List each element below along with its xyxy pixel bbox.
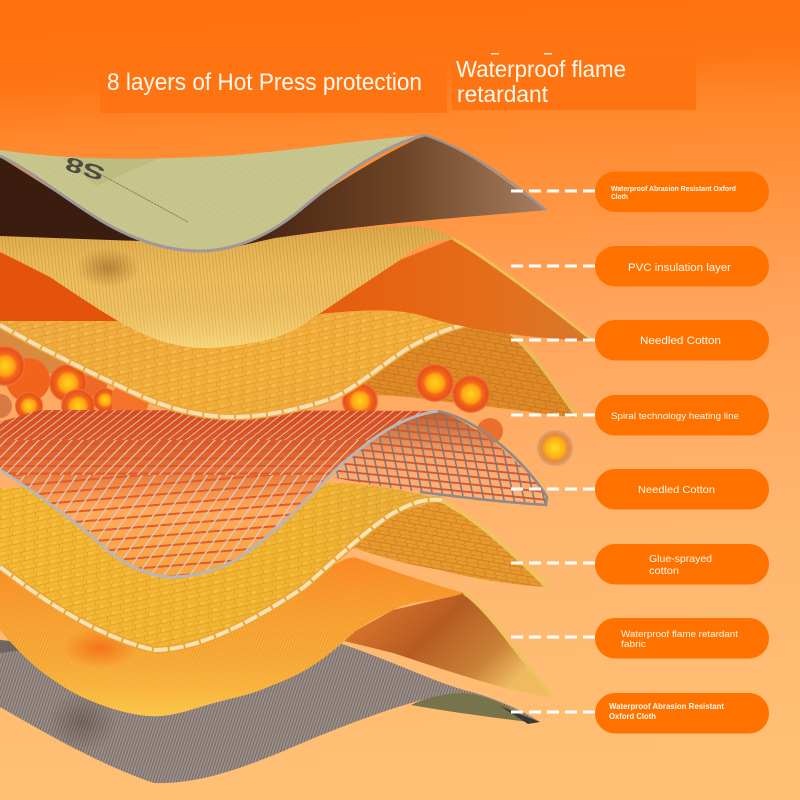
label: waterproof abrasion resistant oxford cloth: Oxford Cloth <box>609 712 656 721</box>
label: waterproof abrasion resistant oxford cloth: Waterproof Abrasion Resistant <box>609 702 724 711</box>
leader lines <box>511 191 595 712</box>
layer 1: waterproof abrasion resistant oxford cloth <box>0 135 546 251</box>
title banner left: 8 layers of Hot Press protection <box>107 69 422 96</box>
label: waterproof abrasion resistant oxford cloth <box>595 172 769 212</box>
label: waterproof flame retardant fabric: fabric <box>621 639 647 649</box>
layer 5: spiral heating line mesh <box>0 410 548 577</box>
heat balls <box>0 346 573 466</box>
label: PVC insulation layer <box>595 246 769 286</box>
label: needled cotton <box>595 320 769 360</box>
label: waterproof flame retardant fabric <box>595 618 769 658</box>
layer 8: grey oxford cloth <box>0 640 540 783</box>
mesh front section <box>0 410 438 577</box>
layer 6: glue-sprayed cotton <box>0 483 547 650</box>
label: spiral technology heating line <box>595 395 769 436</box>
title banner right <box>452 53 696 110</box>
label: waterproof abrasion resistant oxford cloth: Waterproof Abrasion Resistant Oxford <box>611 184 736 193</box>
label: waterproof flame retardant fabric: Waterproof flame retardant <box>621 629 739 639</box>
title banner right: Waterproof flame <box>456 56 626 82</box>
label: waterproof abrasion resistant oxford cloth <box>595 693 769 734</box>
label: waterproof abrasion resistant oxford cloth: Cloth <box>611 192 628 201</box>
layer 7: waterproof flame retardant fabric <box>0 558 553 716</box>
logo on fabric: S8 <box>63 152 107 184</box>
label: PVC insulation layer: PVC insulation layer <box>628 262 731 274</box>
label: glue-sprayed cotton: Glue-sprayed <box>649 553 712 565</box>
layer 4: needled cotton <box>0 311 497 417</box>
label: glue-sprayed cotton: cotton <box>649 565 679 577</box>
label: needled cotton <box>595 469 769 510</box>
layer 4 back: cotton underside <box>0 320 578 418</box>
title banner right: retardant <box>457 81 549 107</box>
title banner left <box>100 62 447 113</box>
mesh back section <box>332 411 548 505</box>
label: glue-sprayed cotton <box>595 544 769 584</box>
label: spiral technology heating line: Spiral technology heating line <box>611 411 739 422</box>
label: needled cotton: Needled Cotton <box>640 335 721 347</box>
label: needled cotton: Needled Cotton <box>638 484 715 496</box>
layer 3: PVC insulation layer <box>0 226 595 348</box>
